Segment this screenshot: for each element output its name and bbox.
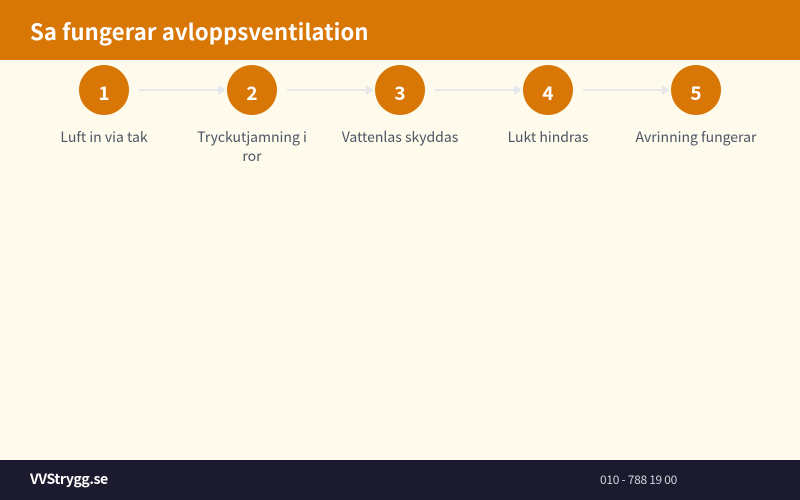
footer xyxy=(0,460,800,500)
step 5 xyxy=(636,65,756,147)
step 5: 5 xyxy=(690,79,702,106)
step 2 xyxy=(197,65,307,166)
brand: VVStrygg.se xyxy=(30,469,108,489)
step 3: Vattenlas skyddas xyxy=(342,127,458,147)
arrows xyxy=(139,85,670,95)
step 5: Avrinning fungerar xyxy=(636,127,756,147)
step 1: Luft in via tak xyxy=(60,127,148,147)
step 1: 1 xyxy=(98,79,110,106)
step 2: Tryckutjamning i ror xyxy=(197,127,307,166)
step 3 xyxy=(342,65,458,147)
step 4: Lukt hindras xyxy=(508,127,588,147)
step 1 xyxy=(60,65,148,147)
step 2: 2 xyxy=(246,79,258,106)
step 3: 3 xyxy=(394,79,406,106)
phone: 010 - 788 19 00 xyxy=(600,471,677,488)
step 4 xyxy=(508,65,588,147)
title: Sa fungerar avloppsventilation xyxy=(30,15,369,47)
header xyxy=(0,0,800,60)
step 4: 4 xyxy=(542,79,554,106)
